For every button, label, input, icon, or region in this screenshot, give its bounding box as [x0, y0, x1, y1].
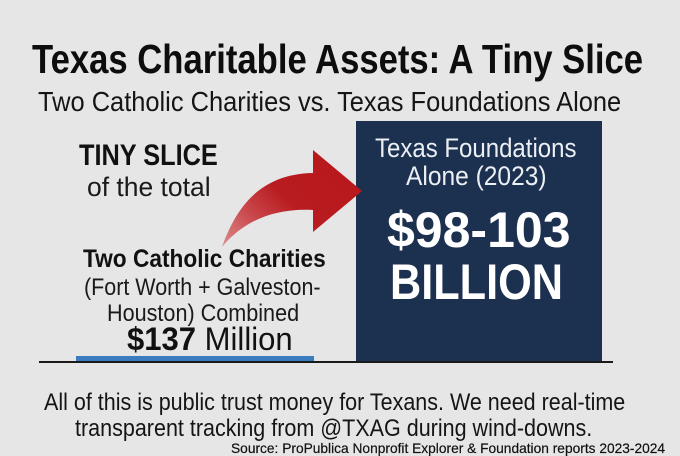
- source: Source: ProPublica Nonprofit Explorer & Foundation reports 2023-2024: [231, 440, 665, 456]
- panel: texas foundations: [356, 121, 602, 363]
- baseline: [39, 361, 613, 363]
- callout: tiny slice: TINY SLICE: [79, 139, 218, 172]
- panel unit: BILLION: [390, 254, 563, 310]
- label: two catholic charities: Two Catholic Charities: [83, 245, 326, 273]
- subtitle: Two Catholic Charities vs. Texas Foundations Alone: [38, 86, 621, 117]
- panel value: $98-103: [387, 202, 570, 258]
- panel heading line 2: Alone (2023): [406, 161, 547, 191]
- label: fort worth + galveston: (Fort Worth + Galveston-: [84, 274, 321, 301]
- panel heading line 1: Texas Foundations: [375, 133, 576, 163]
- label: houston combined: Houston) Combined: [107, 300, 299, 327]
- bar: charities: [76, 356, 314, 362]
- value: 137 million: $137 Million: [127, 321, 293, 357]
- footer text line 1: All of this is public trust money for Texans. We need real-time: [44, 389, 625, 416]
- footer text line 2: transparent tracking from @TXAG during wind-downs.: [75, 415, 592, 442]
- arrow: red curved: [222, 150, 362, 247]
- title: Texas Charitable Assets: A Tiny Slice: [32, 36, 643, 82]
- callout: of the total: of the total: [87, 172, 211, 202]
